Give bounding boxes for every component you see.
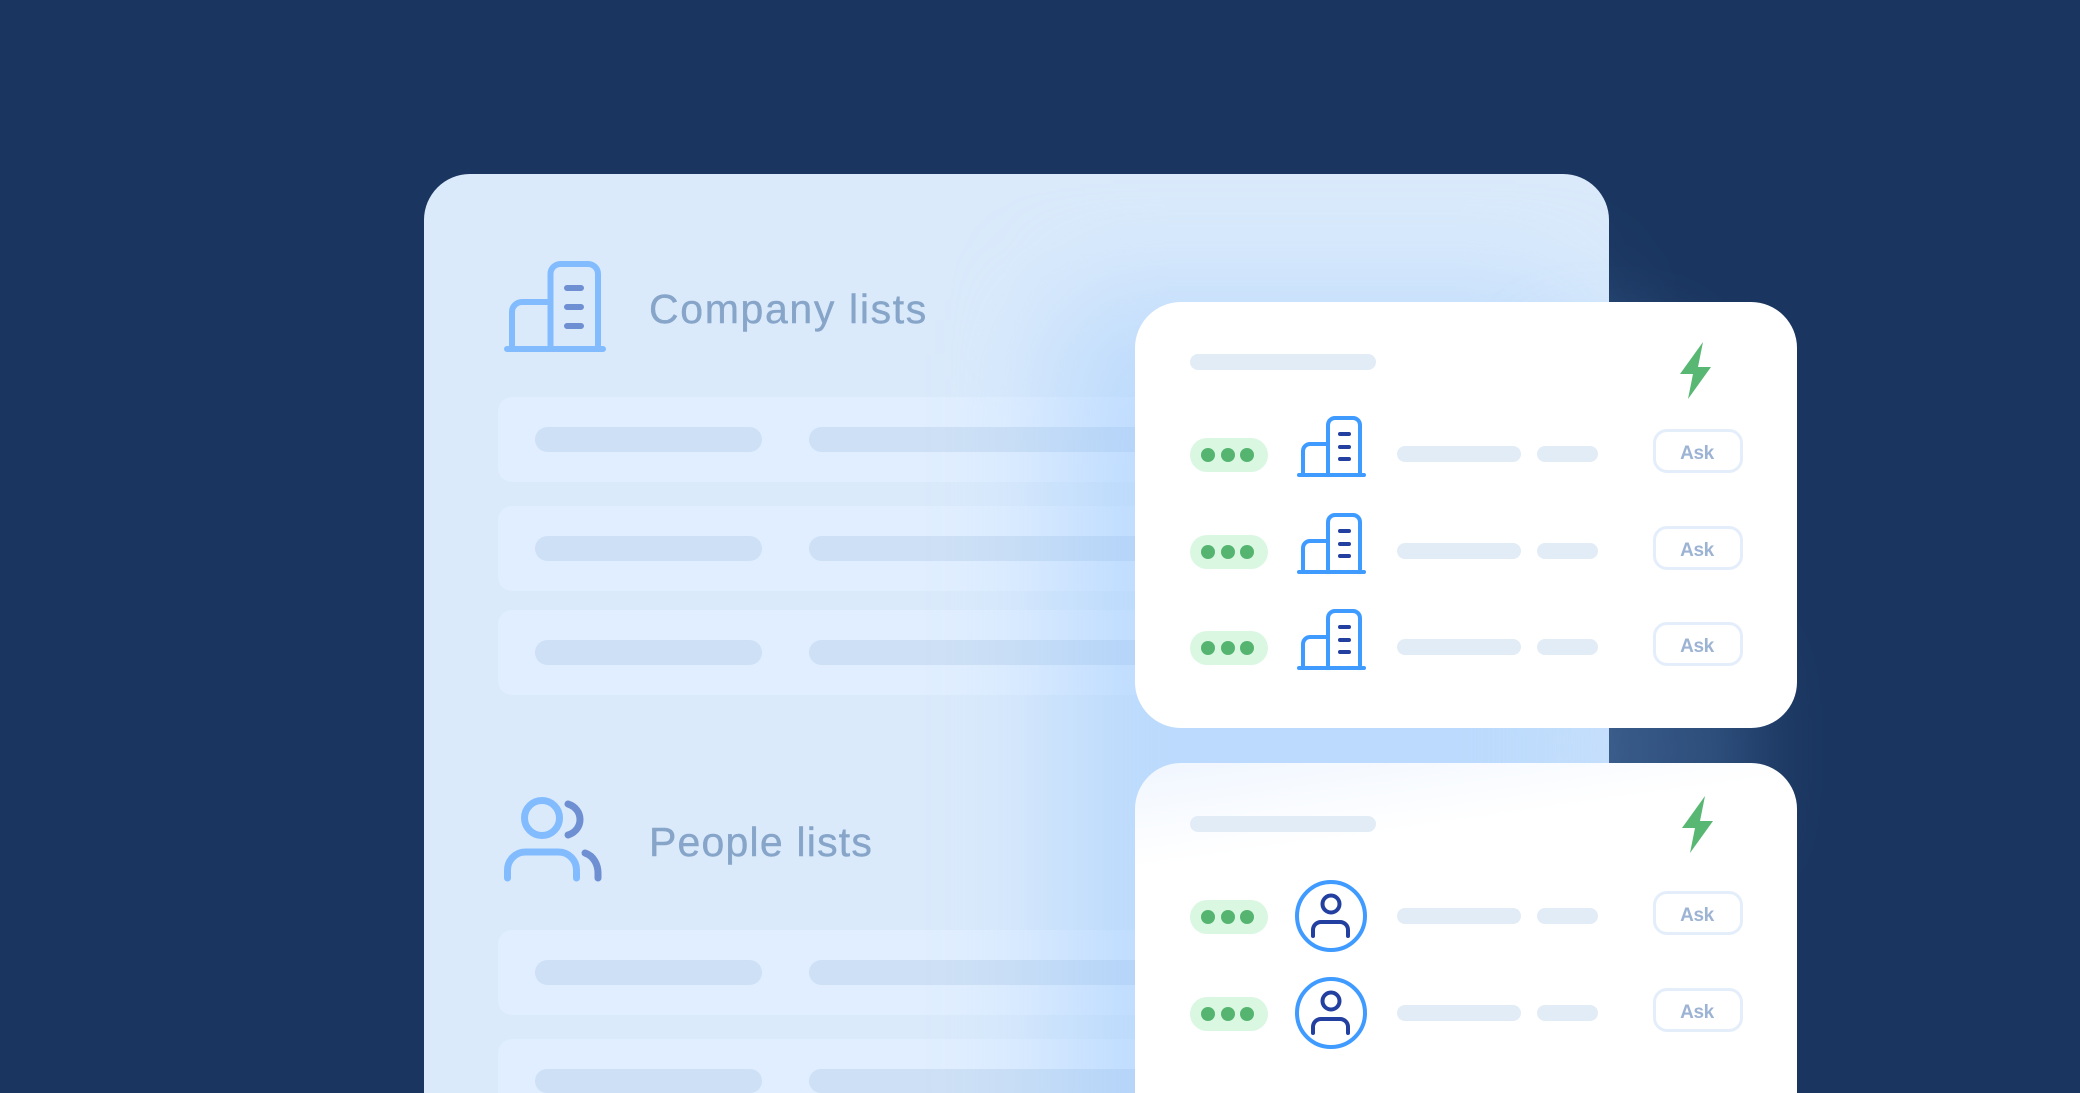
people row 2 [498, 1039, 1498, 1093]
heading: company lists: Company lists [649, 286, 928, 332]
score dot [1201, 545, 1215, 559]
score pill [1190, 631, 1268, 665]
icon: person [1295, 880, 1367, 952]
company row 1 [498, 397, 1498, 482]
button: ask [1653, 429, 1743, 473]
icon: building [1297, 609, 1366, 670]
company row 2 [498, 506, 1498, 591]
card header placeholder [1190, 354, 1376, 370]
button: ask: Ask [1680, 905, 1714, 926]
placeholder: name [535, 640, 762, 665]
card: people results [1135, 763, 1797, 1093]
placeholder: details [809, 640, 1449, 665]
placeholder bar [1537, 908, 1598, 924]
score dot [1221, 448, 1235, 462]
icon: person [1295, 977, 1367, 1049]
placeholder bar [1397, 1005, 1521, 1021]
score dot [1201, 1007, 1215, 1021]
score pill [1190, 900, 1268, 934]
score dot [1201, 910, 1215, 924]
glow between cards [1550, 650, 1750, 850]
people result row 2 [1190, 977, 1743, 1049]
button: ask: Ask [1680, 1002, 1714, 1023]
company result row 3 [1190, 609, 1743, 670]
score dot [1201, 641, 1215, 655]
illustration canvas [424, 174, 1797, 1093]
people row 1 [498, 930, 1498, 1015]
placeholder: details [809, 1069, 1449, 1093]
glow above company card [1540, 340, 1680, 430]
score dot [1240, 1007, 1254, 1021]
button: ask: Ask [1680, 636, 1714, 657]
people result row 1 [1190, 880, 1743, 952]
placeholder: name [535, 536, 762, 561]
score dot [1221, 1007, 1235, 1021]
card header placeholder [1190, 816, 1376, 832]
company row 3 [498, 610, 1498, 695]
button: ask [1653, 526, 1743, 570]
placeholder bar [1537, 1005, 1598, 1021]
button: ask: Ask [1680, 443, 1714, 464]
heading: people lists: People lists [649, 819, 873, 865]
button: ask [1653, 622, 1743, 666]
placeholder: details [809, 536, 1449, 561]
score dot [1240, 641, 1254, 655]
placeholder bar [1537, 639, 1598, 655]
placeholder bar [1397, 543, 1521, 559]
placeholder: details [809, 427, 1449, 452]
placeholder: name [535, 1069, 762, 1093]
company result row 1 [1190, 416, 1743, 477]
placeholder: name [535, 960, 762, 985]
score dot [1221, 910, 1235, 924]
button: ask: Ask [1680, 540, 1714, 561]
placeholder bar [1537, 446, 1598, 462]
placeholder: name [535, 427, 762, 452]
score dot [1240, 545, 1254, 559]
score dot [1221, 545, 1235, 559]
main glow behind cards [1018, 260, 1624, 1093]
icon: building [1297, 513, 1366, 574]
company result row 2 [1190, 513, 1743, 574]
button: ask [1653, 891, 1743, 935]
placeholder bar [1537, 543, 1598, 559]
icon: lightning bolt [1680, 342, 1711, 399]
score pill [1190, 535, 1268, 569]
score pill [1190, 997, 1268, 1031]
icon: company building [504, 261, 606, 352]
placeholder: details [809, 960, 1449, 985]
placeholder bar [1397, 639, 1521, 655]
icon: lightning bolt [1682, 796, 1713, 853]
score dot [1240, 448, 1254, 462]
score dot [1240, 910, 1254, 924]
icon: building [1297, 416, 1366, 477]
placeholder bar [1397, 908, 1521, 924]
icon: people [504, 797, 602, 882]
card: company results [1135, 302, 1797, 728]
score pill [1190, 438, 1268, 472]
button: ask [1653, 988, 1743, 1032]
panel: lists background [424, 174, 1609, 1093]
placeholder bar [1397, 446, 1521, 462]
score dot [1221, 641, 1235, 655]
score dot [1201, 448, 1215, 462]
